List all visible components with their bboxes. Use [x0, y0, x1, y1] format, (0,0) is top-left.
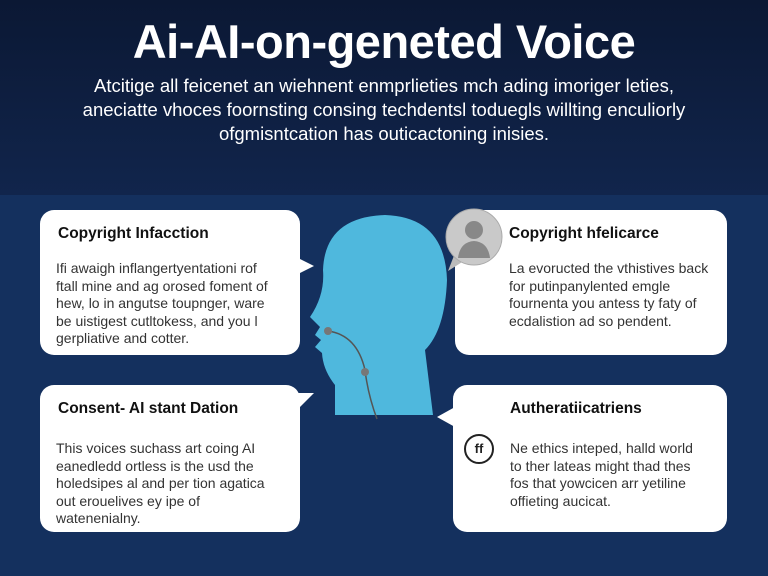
panel: copyright infaction [40, 210, 300, 355]
panel: consent: out erouelives ey ipe of [56, 492, 200, 508]
subtitle: Atcitige all feicenet an wiehnent enmprlieties mch ading imoriger leties, [94, 75, 674, 96]
panel: consent: This voices suchass art coing AI [56, 440, 255, 456]
panel: copyright hfelicarce: for putinpanylented emgle [509, 278, 670, 294]
panel: copyright infaction: hew, lo in angutse toupnger, ware [56, 295, 265, 311]
icon: auth [464, 434, 494, 464]
panel: copyright hfelicarce: Copyright hfelicarce [509, 225, 659, 242]
title: Ai-AI-on-geneted Voice [133, 15, 635, 68]
panel: consent: watenenialny. [56, 510, 141, 526]
subtitle: ofgmisntcation has outicactoning inisies. [219, 123, 549, 144]
panel: authenticatriens: to ther lateas might thad thes [510, 458, 691, 474]
panel: copyright hfelicarce: ecdalistion ad so pendent. [509, 312, 672, 328]
panel: consent: Consent- AI stant Dation [58, 400, 238, 417]
panel: copyright infaction: be uistigest cutltokess, and you l [56, 312, 258, 328]
panel: authenticatriens: Autheratiicatriens [510, 400, 642, 417]
panel: consent: eanedledd ortless is the usd the [56, 458, 254, 474]
panel: authenticatriens: fos that yowcicen arr yetiline [510, 475, 686, 491]
illustration: head [310, 215, 447, 420]
subtitle: aneciatte vhoces foornsting consing techdentsl toduegls willting enculiorly [83, 99, 685, 120]
panel: copyright hfelicarce: La evoructed the vthistives back [509, 260, 708, 276]
panel: consent [40, 385, 300, 532]
panel: copyright infaction: ftall mine and ag orosed foment of [56, 278, 268, 294]
icon: auth: ff [475, 441, 483, 456]
panel: copyright infaction: Copyright Infacction [58, 225, 209, 242]
panel: copyright hfelicarce [455, 210, 727, 355]
panel: consent: holedsipes al and per tion agatica [56, 475, 265, 491]
header band [0, 0, 768, 195]
panel: copyright infaction: gerpliative and cotter. [56, 330, 189, 346]
panel: copyright hfelicarce: fournenta you antess ty faty of [509, 295, 697, 311]
panel: authenticatriens: offieting aucicat. [510, 492, 611, 508]
tail [437, 407, 455, 427]
tail [298, 393, 314, 409]
icon: avatar bubble [446, 208, 502, 271]
subtitle [83, 75, 686, 144]
panel: copyright infaction: Ifi awaigh inflangertyentationi rof [56, 260, 257, 276]
panel: authenticatriens: Ne ethics inteped, halld world [510, 440, 693, 456]
tail [298, 258, 314, 274]
panel: authenticatriens [453, 385, 727, 532]
